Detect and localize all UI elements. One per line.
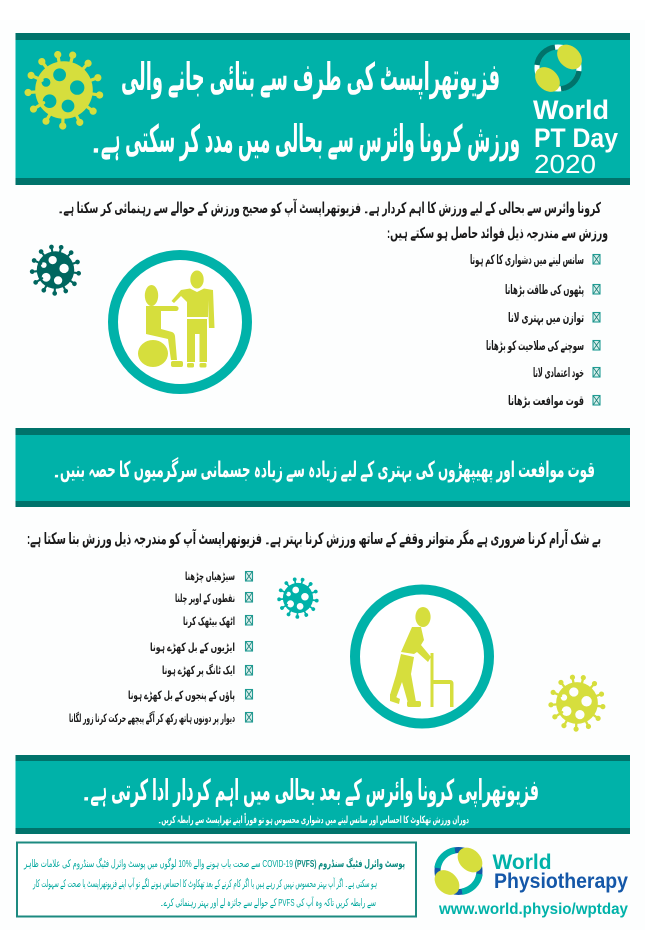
item bbox=[175, 592, 252, 606]
logo: World PT Day 2020: World bbox=[533, 95, 609, 125]
item: دیوار پر دونوں ہاتھ رکھ کر آگے پیچھے حرکت کرنا زور لگانا bbox=[69, 711, 235, 726]
item: نقطوں کے اوپر چلنا bbox=[175, 593, 235, 606]
icon: yellow virus bbox=[24, 50, 104, 130]
heading: banner title bbox=[91, 57, 520, 162]
panel: PVFS box: سے رابطہ کریں تاکہ وہ آپ کی PVFS کے حوالے سے جائزہ لے اور بہتر رہنمائی کرے۔ bbox=[160, 896, 376, 909]
list: exercises bbox=[69, 571, 252, 726]
text block: intro bbox=[58, 199, 608, 242]
logo: World Physiotherapy: Physiotherapy bbox=[494, 870, 628, 893]
item: پاؤں کے پنجوں کے بل کھڑے ہونا bbox=[128, 690, 235, 703]
item bbox=[533, 365, 600, 380]
item: ایڑیوں کے بل کھڑے ہونا bbox=[150, 642, 235, 655]
icon: dark teal virus bbox=[30, 244, 81, 296]
item: سیڑھیاں چڑھنا bbox=[185, 571, 235, 583]
list: benefits bbox=[470, 252, 600, 408]
logo: World PT Day 2020: PT Day bbox=[534, 123, 618, 153]
icon: person with walker in circle bbox=[355, 590, 489, 724]
item: خود اعتمادی لانا bbox=[533, 365, 584, 380]
panel: top banner bbox=[16, 33, 630, 185]
item bbox=[162, 663, 252, 678]
panel: middle banner bbox=[16, 428, 630, 507]
item: توازن میں بہتری لانا bbox=[508, 310, 584, 326]
icon: yellow virus small bbox=[548, 674, 606, 732]
icon: therapist and patient in circle bbox=[113, 255, 247, 389]
item: اٹھک بیٹھک کرنا bbox=[183, 616, 235, 628]
item bbox=[128, 690, 252, 703]
item: قوت موافعت بڑھانا bbox=[508, 393, 584, 408]
panel: PVFS box: پوسٹ وائرل فٹیگ سنڈروم (PVFS) COVID-19 سے صحت یاب ہونے والے %10 لوگوں میں پوسٹ وائرل فٹیگ سنڈروم کی علامات ظاہر bbox=[23, 857, 405, 870]
panel: lower banner bbox=[16, 755, 630, 834]
text: website: www.world.physio/wptday bbox=[438, 901, 628, 918]
item bbox=[505, 282, 600, 297]
logo: World PT Day 2020: 2020 bbox=[534, 149, 596, 179]
item bbox=[508, 310, 600, 326]
logo: World Physiotherapy bbox=[430, 843, 628, 918]
panel: PVFS box bbox=[17, 842, 416, 916]
logo: World PT Day 2020 bbox=[530, 40, 618, 179]
item bbox=[69, 711, 252, 726]
icon: teal virus bbox=[277, 577, 319, 619]
logo: World Physiotherapy: World bbox=[492, 851, 552, 874]
item: ایک ٹانگ پر کھڑے ہونا bbox=[162, 663, 235, 678]
